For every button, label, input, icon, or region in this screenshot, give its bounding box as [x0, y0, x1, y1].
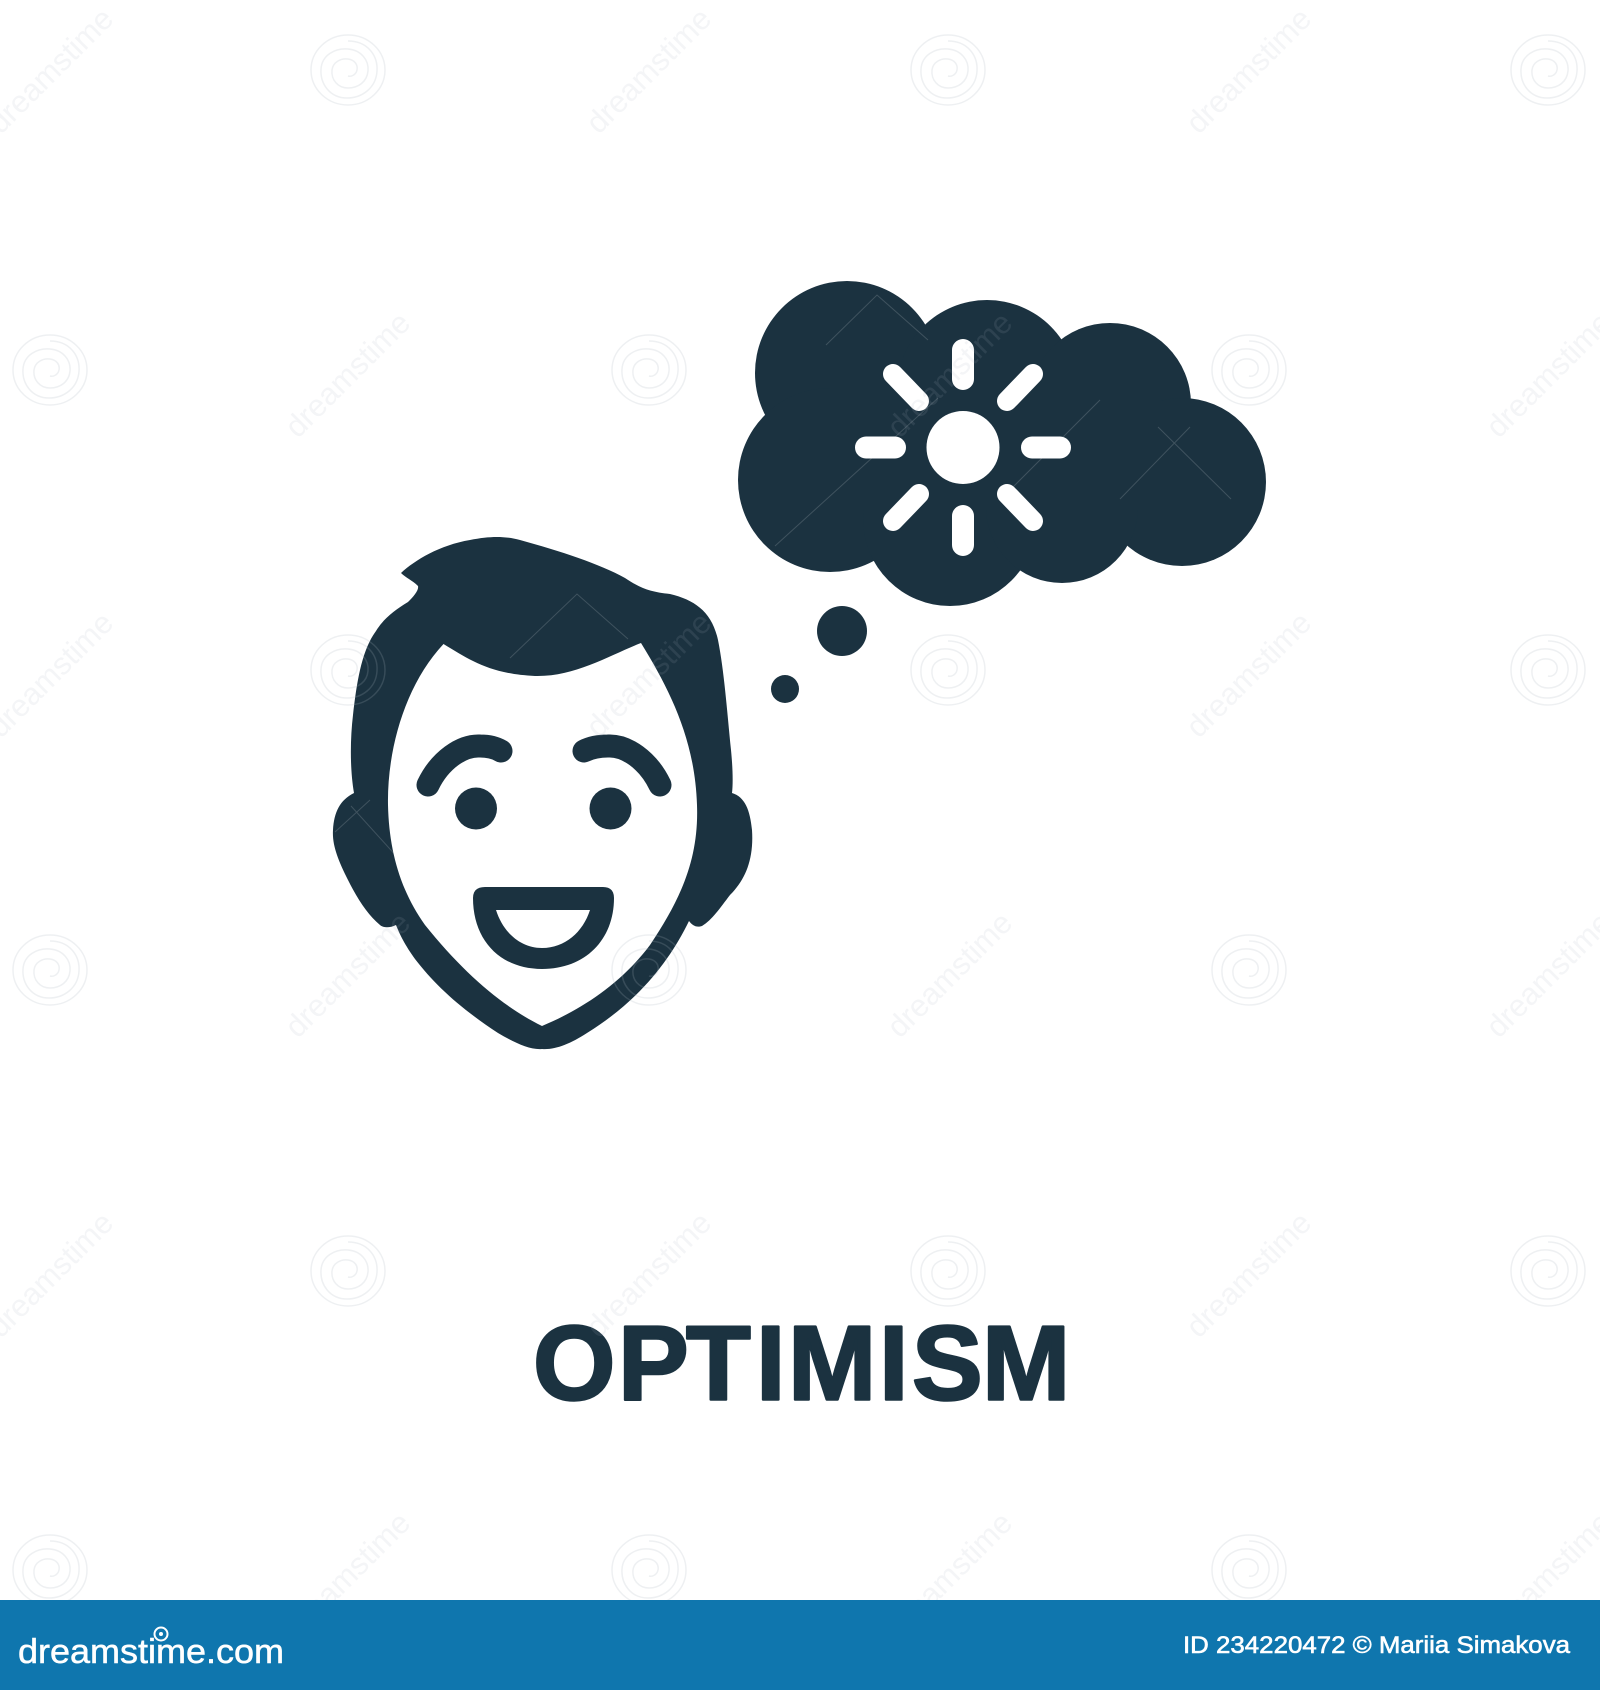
watermark text: dreamstime: [1179, 1205, 1318, 1344]
watermark text: dreamstime: [579, 1205, 718, 1344]
icon: thought bubbles: [771, 606, 867, 703]
watermark text: dreamstime: [1179, 1, 1318, 140]
watermark text: dreamstime: [579, 1, 718, 140]
watermark text: dreamstime: [1179, 605, 1318, 744]
watermark text: dreamstime: [278, 905, 417, 1044]
icon: smiling mouth: [473, 887, 614, 969]
icon: head and hair: [333, 537, 752, 1049]
icon: man with thought cloud: [333, 281, 1266, 1049]
watermark text: dreamstime: [880, 305, 1019, 444]
watermark text: dreamstime: [278, 305, 417, 444]
icon: thought cloud: [738, 281, 1266, 606]
watermark text: dreamstime: [880, 905, 1019, 1044]
icon: sun: [866, 350, 1060, 545]
title: OPTIMISM: [533, 1304, 1070, 1422]
watermark text: dreamstime: [579, 605, 718, 744]
watermark hairlines on artwork: [335, 295, 1231, 859]
icon: eyes: [455, 788, 632, 830]
watermark text: dreamstime: [880, 1505, 1019, 1644]
watermark text: dreamstime: [278, 1505, 417, 1644]
footer bar: [0, 1600, 1600, 1690]
footer credit: ID 234220472 © Mariia Simakova: [1183, 1632, 1570, 1659]
icon: eyebrows: [428, 746, 660, 785]
footer logo: dreamstime.com: [18, 1633, 284, 1671]
